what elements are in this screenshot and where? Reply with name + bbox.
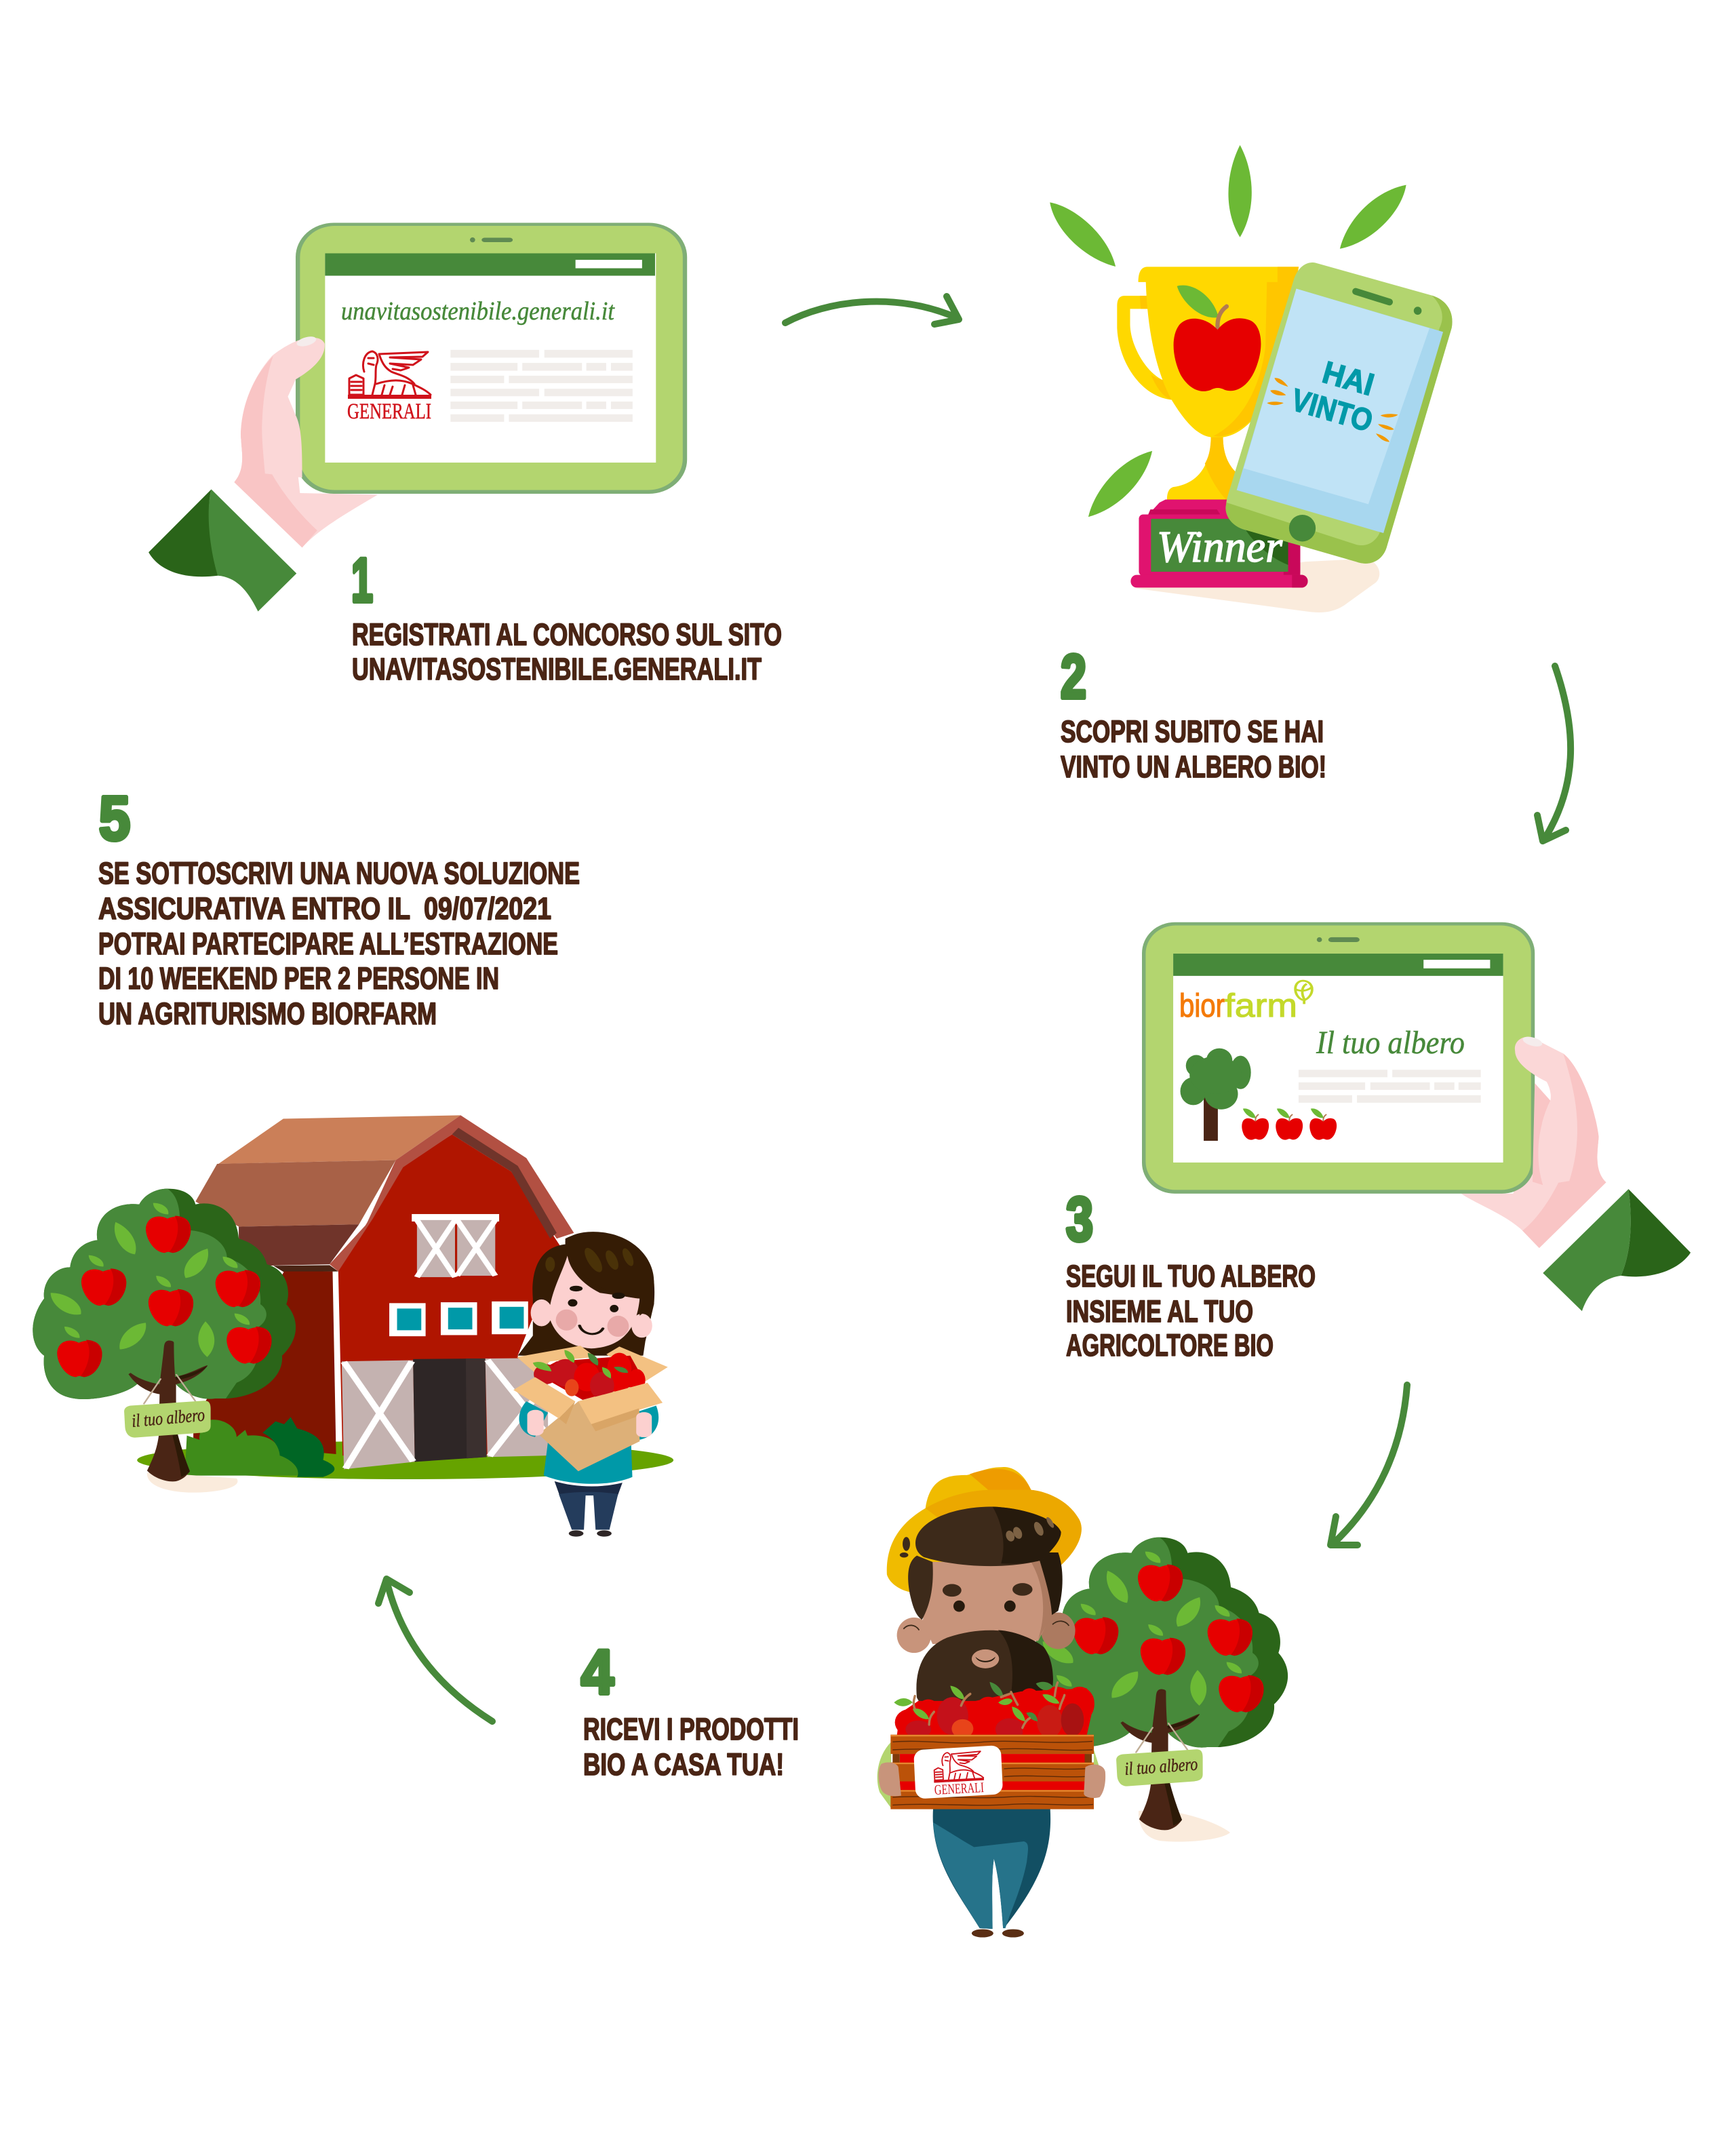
text: step 3 <box>1066 1259 1316 1363</box>
illustration: hand holding tablet with biorfarm page <box>1142 922 1691 1311</box>
logo: Generali: GENERALI <box>347 399 431 424</box>
illustration: hand holding tablet with Generali site <box>149 222 687 612</box>
panel: step 2 win <box>1050 145 1453 784</box>
text: step 2: VINTO UN ALBERO BIO! <box>1061 749 1326 784</box>
text: step 5: POTRAI PARTECIPARE ALL’ESTRAZIONE <box>98 926 558 961</box>
illustration: apple tree <box>1025 1538 1288 1842</box>
text: step 5: SE SOTTOSCRIVI UNA NUOVA SOLUZIONE <box>98 856 580 891</box>
phone <box>1225 262 1453 564</box>
tree sign text: il tuo albero <box>1124 1754 1198 1779</box>
text: step 3: INSIEME AL TUO <box>1066 1294 1253 1329</box>
text: step 5 <box>98 856 580 1031</box>
apple box <box>513 1346 668 1471</box>
winner plaque text: Winner <box>1157 522 1282 572</box>
barn <box>193 1115 574 1469</box>
number 5: 5 <box>99 784 130 853</box>
text: step 1: UNAVITASOSTENIBILE.GENERALI.IT <box>352 652 762 686</box>
crate logo: Generali <box>932 1751 985 1798</box>
text: step 1 <box>352 617 782 686</box>
number 4: 4 <box>581 1638 614 1707</box>
number 1: 1 <box>351 546 373 615</box>
icon: tree <box>1181 1049 1251 1141</box>
panel: step 3 follow tree <box>1066 922 1691 1363</box>
text: step 1: REGISTRATI AL CONCORSO SUL SITO <box>352 617 782 652</box>
text: step 5: DI 10 WEEKEND PER 2 PERSONE IN <box>98 961 499 996</box>
logo: biorfarm: bior <box>1179 988 1225 1024</box>
text: step 4: RICEVI I PRODOTTI <box>583 1712 799 1746</box>
tree sign text: il tuo albero <box>131 1405 205 1431</box>
panel: step 5 prize <box>33 784 673 1537</box>
text: step 5: ASSICURATIVA ENTRO IL 09/07/2021 <box>98 891 551 926</box>
crate <box>890 1735 1094 1810</box>
phone text: hai vinto: VINTO <box>1288 382 1377 438</box>
girl <box>513 1232 668 1537</box>
text: step 2: SCOPRI SUBITO SE HAI <box>1061 714 1324 749</box>
hands <box>878 1763 1105 1798</box>
arrow: step 3 to 4 <box>1330 1385 1407 1545</box>
logo: biorfarm <box>1179 988 1297 1024</box>
crate logo: Generali: GENERALI <box>934 1779 984 1798</box>
site address: unavitasostenibile.generali.it <box>341 297 615 326</box>
text: step 4: BIO A CASA TUA! <box>583 1747 784 1782</box>
text: step 3: AGRICOLTORE BIO <box>1066 1328 1274 1363</box>
phone text: hai vinto: HAI <box>1319 354 1378 402</box>
text: step 3: SEGUI IL TUO ALBERO <box>1066 1259 1316 1293</box>
text: step 4 <box>583 1712 799 1782</box>
logo: Generali <box>347 351 431 424</box>
arrow: step 2 to 3 <box>1537 666 1571 841</box>
bushes <box>184 1417 334 1477</box>
illustration: barn, tree and girl with apple box <box>33 1115 673 1537</box>
number 2: 2 <box>1061 642 1086 711</box>
logo: biorfarm: farm <box>1225 988 1297 1024</box>
number 3: 3 <box>1066 1185 1093 1254</box>
illustration: trophy and phone <box>1050 145 1453 612</box>
illustration: farmer with crate <box>877 1467 1105 1938</box>
text: step 5: UN AGRITURISMO BIORFARM <box>98 996 437 1031</box>
page title: il tuo albero: Il tuo albero <box>1316 1025 1465 1061</box>
panel: step 4 farmer <box>581 1467 1288 1938</box>
arrow: step 1 to 2 <box>785 296 959 324</box>
text: step 2 <box>1061 714 1326 784</box>
crate apples <box>894 1676 1094 1740</box>
small apples <box>1242 1108 1337 1140</box>
panel: step 1 register <box>149 222 782 686</box>
phone text: hai vinto <box>1288 354 1378 438</box>
arrow: step 4 to 5 <box>378 1579 492 1721</box>
